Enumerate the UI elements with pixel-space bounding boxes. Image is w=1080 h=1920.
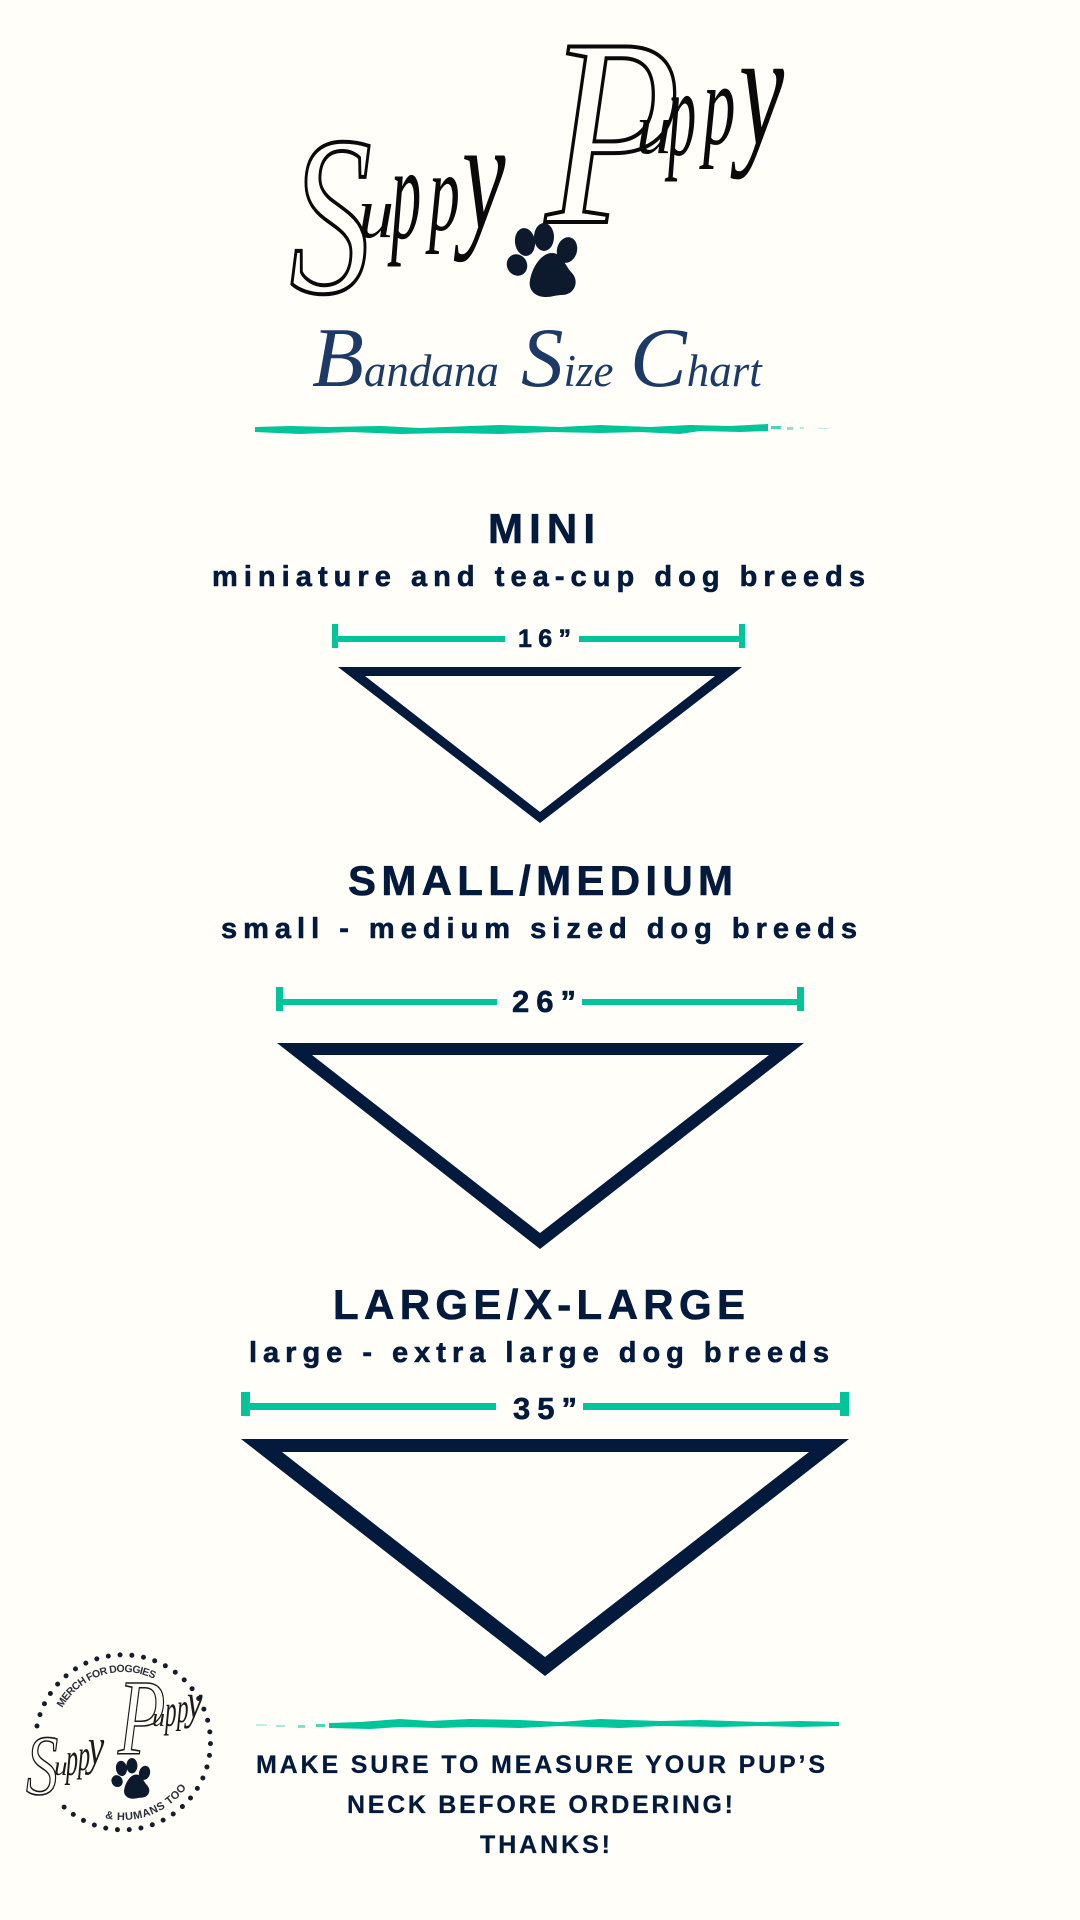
- logo word: Suppy: p: [387, 119, 421, 268]
- badge word: Suppy: S: [26, 1718, 58, 1813]
- footer note: [256, 1751, 825, 1859]
- badge word: Puppy: p: [163, 1686, 177, 1736]
- dimension line: 16 inches: 16”: [518, 625, 571, 653]
- icon: badge paw print: [109, 1758, 152, 1799]
- dimension line: 26 inches: [276, 984, 804, 1019]
- chart subtitle: ize: [564, 346, 614, 396]
- icon: paw print: [503, 223, 580, 297]
- logo word: Puppy: p: [699, 39, 735, 170]
- teal brush divider: footer: [256, 1719, 839, 1729]
- badge logo: [26, 1652, 213, 1832]
- bandana triangle: small/medium: [277, 1043, 804, 1249]
- logo word: Puppy: [544, 0, 784, 281]
- logo word: Puppy: p: [665, 44, 696, 182]
- logo word: Suppy: y: [454, 89, 506, 263]
- heading: mini: MINI: [488, 505, 595, 552]
- section: large/x-large: [241, 1281, 849, 1676]
- dimension line: 35 inches: 35”: [513, 1391, 577, 1426]
- ring text: and humans too: & HUMANS TOO: [106, 1784, 185, 1820]
- chart subtitle: hart: [687, 346, 762, 396]
- description: small/medium: small - medium sized dog breeds: [221, 913, 857, 945]
- description: mini: miniature and tea-cup dog breeds: [212, 561, 865, 593]
- chart subtitle: andana: [364, 346, 499, 396]
- chart subtitle: B: [312, 311, 364, 405]
- dimension line: 35 inches: [241, 1391, 849, 1426]
- badge word: Puppy: [117, 1659, 203, 1778]
- badge word: Puppy: P: [117, 1659, 166, 1778]
- note line 2: NECK BEFORE ORDERING!: [347, 1791, 733, 1819]
- heading: large/x-large: LARGE/X-LARGE: [333, 1281, 745, 1328]
- logo word: Suppy: u: [358, 173, 394, 253]
- note line 1: MAKE SURE TO MEASURE YOUR PUP’S: [256, 1751, 825, 1779]
- header logo: Suppy Puppy: [290, 0, 784, 341]
- dotted ring: [37, 1655, 210, 1830]
- section: small/medium: [221, 857, 857, 1249]
- description: large/x-large: large - extra large dog breeds: [249, 1337, 829, 1369]
- badge word: Puppy: p: [176, 1686, 189, 1732]
- teal brush divider: top: [255, 424, 828, 434]
- note line 3: THANKS!: [480, 1831, 610, 1859]
- chart subtitle: S: [521, 311, 564, 405]
- heading: small/medium: SMALL/MEDIUM: [348, 857, 733, 904]
- badge word: Puppy: y: [184, 1675, 203, 1730]
- ring text: merch for doggies: MERCH FOR DOGGIES: [56, 1664, 156, 1708]
- badge word: Suppy: [26, 1718, 104, 1813]
- bandana triangle: mini: [338, 667, 742, 823]
- badge word: Suppy: y: [85, 1718, 104, 1776]
- bandana triangle: large/x-large: [241, 1439, 849, 1676]
- section: mini: [212, 505, 865, 823]
- logo word: Suppy: p: [425, 130, 460, 255]
- badge word: Suppy: p: [76, 1730, 90, 1780]
- badge word: Suppy: p: [64, 1733, 78, 1786]
- logo word: Suppy: [290, 89, 506, 341]
- logo word: Suppy: S: [290, 90, 372, 341]
- logo word: Puppy: u: [636, 89, 672, 169]
- badge word: Puppy: u: [152, 1703, 165, 1732]
- dimension line: 26 inches: 26”: [512, 984, 576, 1019]
- badge word: Suppy: u: [54, 1751, 68, 1781]
- logo word: Puppy: y: [730, 0, 784, 180]
- chart subtitle: C: [630, 311, 688, 405]
- dimension line: 16 inches: [332, 624, 745, 653]
